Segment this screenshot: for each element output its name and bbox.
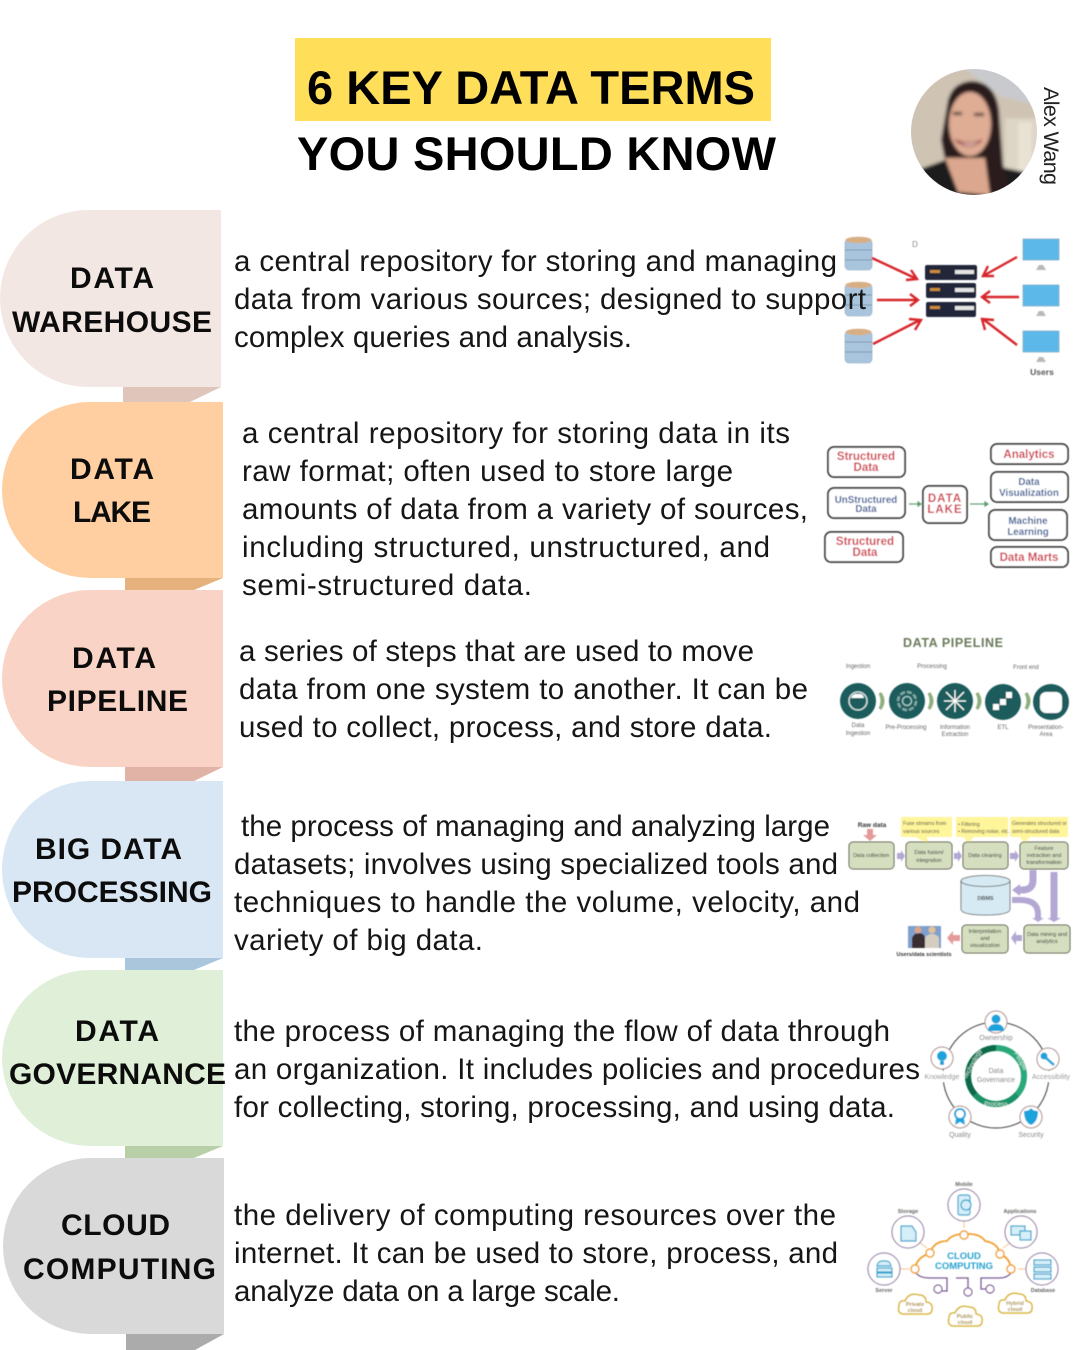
diagram: warehouse: Users [1030,367,1054,377]
description: raw format; often used to store large [242,455,733,488]
diagram: data lake: Structured [836,536,894,548]
panel: data warehouse [0,210,1059,402]
diagram: data lake: UnStructured [835,495,897,506]
diagram: data lake: DATA [928,493,962,505]
diagram: cloud computing: Storage [898,1209,918,1215]
diagram: governance wheel: Ownership [979,1035,1013,1042]
description [239,635,808,744]
term heading: CLOUD [61,1209,170,1242]
diagram: governance wheel: Technology [962,1047,984,1080]
diagram: cloud computing: Mobile [955,1182,973,1188]
diagram: pipeline: Ingestion [846,731,870,737]
diagram: big data flow: Raw data [858,822,887,829]
fold [123,387,221,402]
description: techniques to handle the volume, velocity, and [234,886,860,919]
description [242,417,808,602]
description: semi-structured data. [242,569,532,602]
diagram: pipeline [840,636,1069,738]
diagram: pipeline: Ingestion [846,664,870,670]
term heading: PIPELINE [47,685,188,718]
diagram: pipeline: Front end [1013,665,1039,671]
diagram: cloud computing: Public [957,1314,973,1320]
description: a central repository for storing and managing [234,245,837,278]
diagram: governance wheel: Security [1018,1132,1044,1139]
diagram: governance wheel: Accessibility [1032,1074,1071,1081]
diagram: big data flow: Users/data scientists [896,952,952,958]
panel: data lake [2,402,1068,602]
description [234,1199,838,1308]
diagram: pipeline: DATA PIPELINE [903,636,1003,650]
description [234,245,866,354]
description: variety of big data. [234,924,483,957]
diagram: big data flow: Generates structured or [1012,821,1067,827]
diagram: big data flow: • Removing noise, etc. [958,829,1010,835]
label shape [2,402,223,578]
diagram: data lake: Learning [1007,527,1049,538]
diagram: data lake: Data [853,547,878,559]
description: analyze data on a large scale. [234,1275,620,1308]
diagram: big data flow: and [980,936,990,942]
description: including structured, unstructured, and [242,531,770,564]
diagram: governance wheel: People [1012,1051,1029,1072]
label shape [2,781,223,958]
title highlight [295,38,771,121]
description: a central repository for storing data in its [242,417,790,450]
diagram: pipeline: Presentation- [1028,725,1064,731]
title [295,38,777,180]
diagram: data lake: Data [854,462,879,474]
fold [125,578,223,590]
description: a series of steps that are used to move [239,635,754,668]
description: data from one system to another. It can be [239,673,808,706]
term heading: DATA [70,262,154,295]
description: amounts of data from a variety of sources, [242,493,808,526]
diagram: governance wheel: Data [989,1068,1003,1075]
diagram: big data flow: Data mining and [1027,932,1067,938]
diagram: big data flow: transformation [1026,860,1062,866]
panel: big data processing [2,781,1070,970]
diagram: big data flow: Data collection [853,853,889,859]
description: internet. It can be used to store, process, and [234,1237,838,1270]
diagram: governance wheel: Process [984,1101,1008,1108]
label shape [0,210,221,387]
diagram: big data flow: Data fusion/ [914,850,944,856]
diagram: pipeline: Information [940,725,970,731]
diagram: big data flow: Feature [1035,846,1053,852]
fold [126,1334,224,1350]
description [234,810,860,957]
diagram: data lake [825,444,1068,567]
diagram: big data flow: Fuse streams from [903,821,946,827]
fold [125,767,223,781]
description [234,1015,920,1124]
fold [125,1146,223,1158]
description: the process of managing the flow of data through [234,1015,890,1048]
diagram: data lake: Data [855,504,877,515]
diagram: big data flow: Interpretation [969,929,1001,935]
description: datasets; involves using specialized tools and [234,848,838,881]
term heading: WAREHOUSE [12,306,212,339]
title line 1: 6 KEY DATA TERMS [307,61,755,114]
diagram: pipeline: Data [852,723,865,729]
term heading: DATA [75,1015,159,1048]
diagram: big data flow: visualization [970,943,1000,949]
diagram: pipeline: Pre-Processing [885,725,927,731]
term heading [23,1209,216,1286]
diagram: warehouse: D [912,240,918,249]
diagram: cloud computing: Database [1031,1288,1055,1294]
diagram: big data flow: extraction and [1027,853,1061,859]
diagram: governance wheel: Knowledge [925,1074,959,1081]
diagram: data lake: Visualization [999,488,1059,499]
diagram: data lake: Machine [1008,516,1048,527]
description: data from various sources; designed to support [234,283,866,316]
term heading [47,642,188,718]
fold [125,958,223,970]
description: for collecting, storing, processing, and using data. [234,1091,895,1124]
term heading: BIG DATA [35,833,182,866]
diagram: cloud computing: cloud [908,1308,922,1314]
diagram: big data flow: semi-structured data [1012,829,1059,835]
author name: Alex Wang [1039,87,1063,185]
diagram: data lake: Data Marts [1000,552,1058,564]
description: complex queries and analysis. [234,321,632,354]
diagram: warehouse [845,237,1059,377]
diagram: data lake: LAKE [927,504,963,516]
diagram: governance wheel: Governance [977,1077,1015,1084]
diagram: cloud computing: Private [906,1302,924,1308]
diagram: big data flow [849,817,1070,958]
diagram: data lake: Structured [837,451,895,463]
author portrait [911,69,1037,195]
term heading [9,1015,226,1091]
diagram: pipeline: Processing [917,664,947,670]
diagram: big data flow: integration [916,858,942,864]
diagram: big data flow: analytics [1036,939,1058,945]
diagram: cloud computing [868,1182,1058,1326]
diagram: big data flow: various sources [903,829,940,835]
term heading: GOVERNANCE [9,1058,226,1091]
diagram: pipeline: Extraction [942,732,968,738]
description: used to collect, process, and store data. [239,711,772,744]
term heading: DATA [72,642,156,675]
diagram: big data flow: • Filtering [958,822,980,828]
diagram: cloud computing: COMPUTING [935,1261,993,1272]
term heading: LAKE [73,496,151,529]
diagram: big data flow: Data cleaning [968,853,1002,859]
term heading [12,833,212,909]
label backdrops keep the ring open behind side labels [925,1071,959,1082]
term heading: PROCESSING [12,876,212,909]
description: the delivery of computing resources over the [234,1199,836,1232]
diagram: data lake: Data [1018,477,1040,488]
diagram: cloud computing: Applications [1003,1209,1037,1215]
diagram: cloud computing: cloud [958,1320,972,1326]
label shape [2,590,223,767]
label shape [2,970,223,1146]
title line 2: YOU SHOULD KNOW [297,127,777,180]
diagram: big data flow: DBMS [977,896,994,902]
description: the process of managing and analyzing large [241,810,830,843]
diagram: cloud computing: Server [875,1288,893,1294]
diagram: pipeline: ETL [997,725,1009,731]
term heading: COMPUTING [23,1253,216,1286]
diagram: governance wheel: Quality [949,1132,971,1139]
term heading [70,453,154,529]
diagram: data lake: Analytics [1003,449,1055,461]
diagram: governance wheel [925,1011,1071,1139]
panel: data governance [2,970,1071,1158]
panel: cloud computing [3,1158,1058,1350]
diagram: cloud computing: CLOUD [947,1251,981,1262]
diagram: pipeline: Area [1040,732,1053,738]
diagram: cloud computing: cloud [1008,1307,1022,1313]
diagram: cloud computing: Hybrid [1006,1301,1024,1307]
term heading: DATA [70,453,154,486]
label shape [3,1158,224,1334]
description: an organization. It includes policies and procedures [234,1053,920,1086]
panel: data pipeline [2,590,1069,781]
term heading [12,262,212,339]
